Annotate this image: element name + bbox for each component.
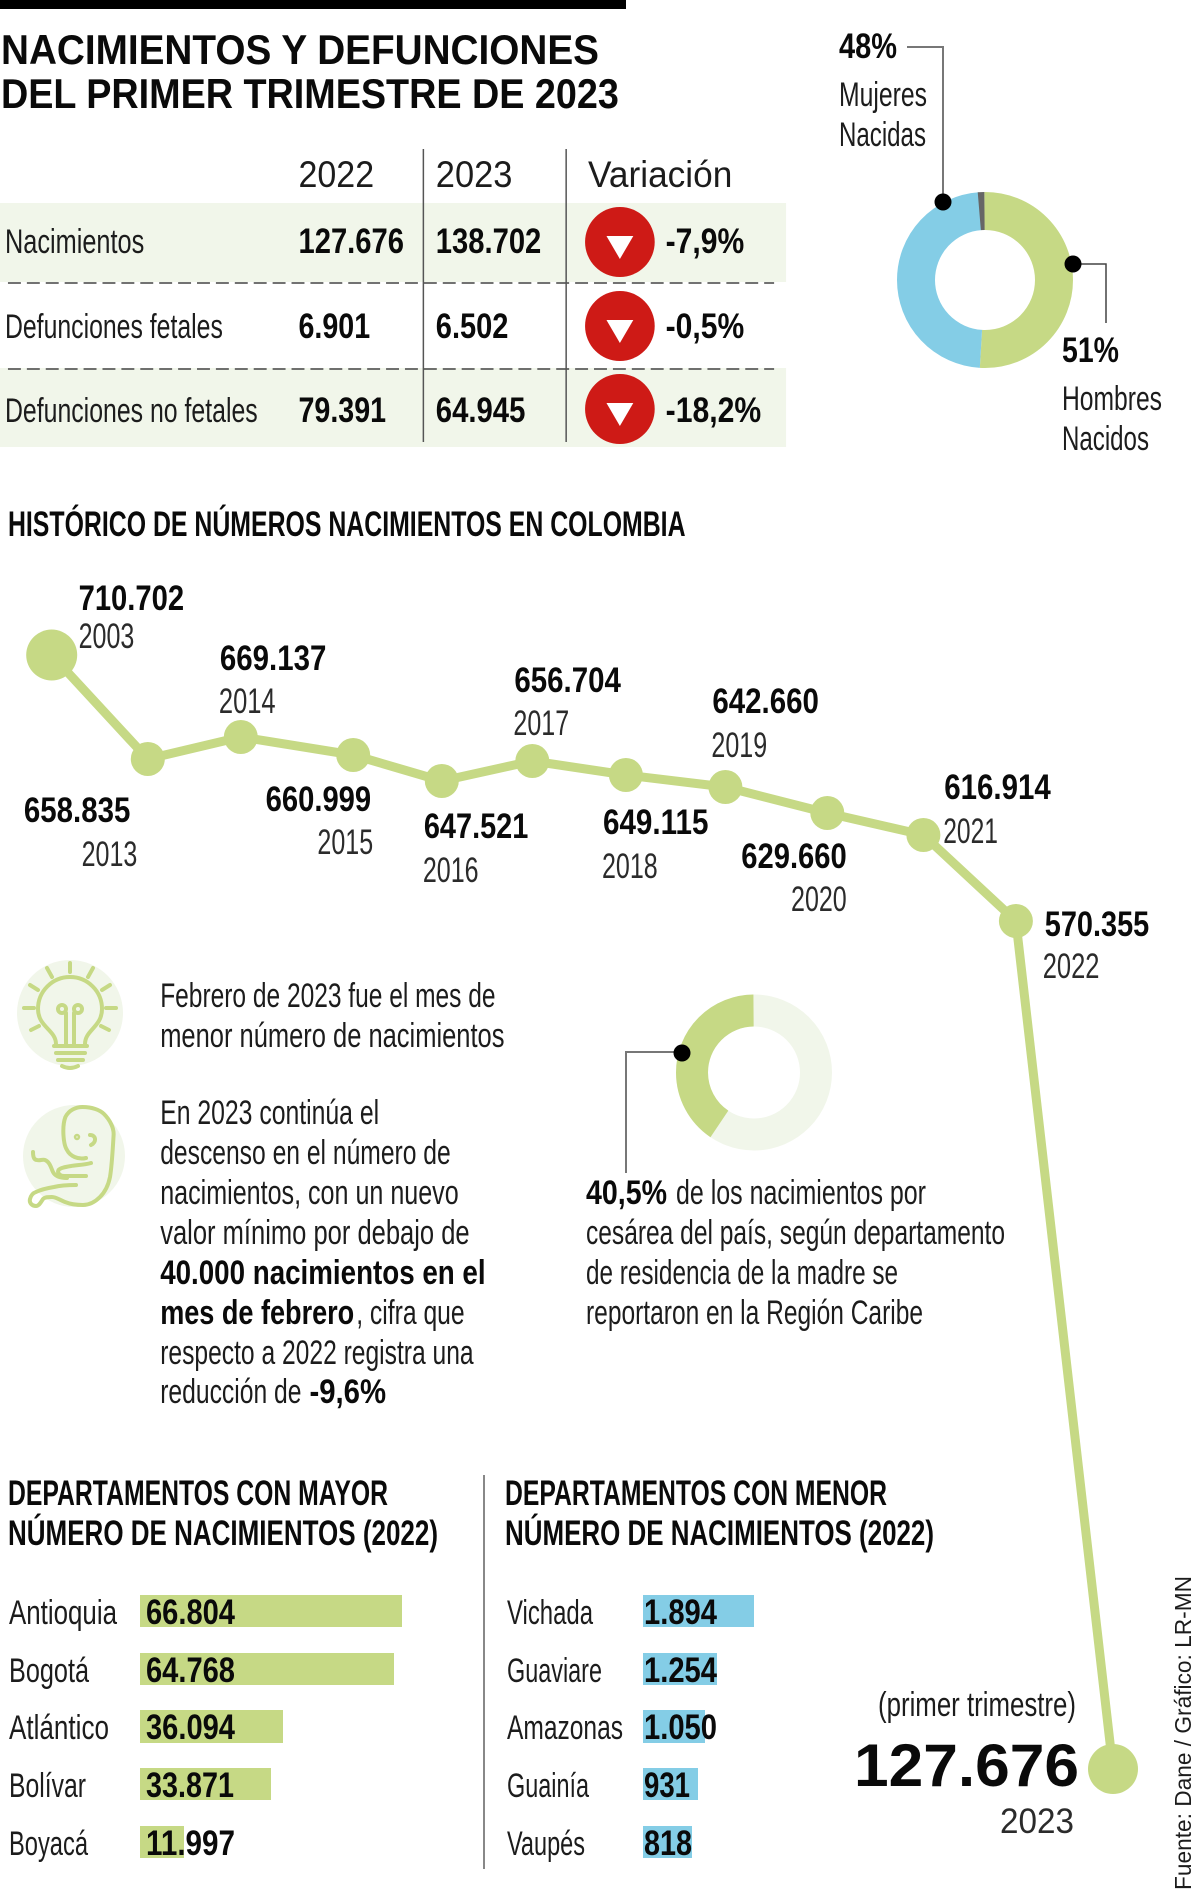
point label 2023 first quarter: 127.676 xyxy=(854,1732,1079,1799)
text: caesarean: de los nacimientos por xyxy=(676,1174,926,1212)
point label 2017 xyxy=(513,661,621,743)
table header xyxy=(298,154,732,195)
callout: men: 51% xyxy=(1062,331,1119,370)
point label 2019: 642.660 xyxy=(712,682,819,721)
point label 2017: 2017 xyxy=(513,704,569,743)
point label 2022: 2022 xyxy=(1043,947,1099,986)
text: descent explanation: -9,6% xyxy=(309,1373,386,1411)
bar chart: fewest births: 818 xyxy=(644,1824,692,1863)
bar chart: most births: 36.094 xyxy=(146,1708,235,1747)
row: defunciones fetales: 6.901 xyxy=(298,307,370,346)
point label 2019 xyxy=(711,682,819,765)
row: defunciones no fetales: Defunciones no fetales xyxy=(5,392,258,430)
text: caesarean: cesárea del país, según departamento xyxy=(586,1214,1005,1252)
text: descent explanation xyxy=(160,1094,486,1411)
callout: men: Nacidos xyxy=(1062,420,1149,458)
bar chart: fewest births: Vichada xyxy=(507,1594,593,1632)
top black bar xyxy=(0,0,626,9)
bar chart: most births: 66.804 xyxy=(146,1593,235,1632)
bar chart: fewest births: Guaviare xyxy=(507,1652,602,1690)
heading: most births xyxy=(8,1474,438,1553)
text: descent explanation: reducción de xyxy=(160,1373,301,1411)
row: defunciones no fetales: 79.391 xyxy=(298,391,386,430)
table header: Variación xyxy=(588,154,732,195)
text: febrero xyxy=(160,977,504,1055)
donut: men and women born xyxy=(916,211,1054,349)
text: descent explanation: respecto a 2022 registra una xyxy=(160,1334,474,1372)
bar chart: most births xyxy=(9,1593,402,1863)
point label 2021 xyxy=(943,768,1051,851)
point label 2015: 2015 xyxy=(317,823,373,862)
text: descent explanation: En 2023 continúa el xyxy=(160,1094,379,1132)
heading: most births: NÚMERO DE NACIMIENTOS (2022) xyxy=(8,1513,438,1553)
callout: women xyxy=(839,27,952,210)
row: nacimientos: 138.702 xyxy=(436,222,541,261)
heading: historical births: HISTÓRICO DE NÚMEROS NACIMIENTOS EN COLOMBIA xyxy=(8,504,686,544)
point label 2003: 710.702 xyxy=(79,579,184,618)
table header: 2022 xyxy=(298,154,374,195)
donut: caesarean share xyxy=(692,1010,816,1134)
row: defunciones no fetales xyxy=(5,374,761,444)
bar chart: fewest births: Vaupés xyxy=(507,1825,585,1863)
panel: sex donut chart xyxy=(839,27,1162,458)
point label 2023 first quarter: (primer trimestre) xyxy=(878,1686,1076,1724)
point label 2020: 629.660 xyxy=(741,837,847,876)
point label 2015 xyxy=(266,780,373,862)
text: caesarean: reportaron en la Región Caribe xyxy=(586,1294,923,1332)
callout: women: 48% xyxy=(839,27,897,66)
text: febrero: menor número de nacimientos xyxy=(160,1017,504,1055)
row: defunciones fetales: -0,5% xyxy=(666,307,744,346)
heading: fewest births: DEPARTAMENTOS CON MENOR xyxy=(505,1474,887,1513)
point label 2016: 2016 xyxy=(423,851,479,890)
source credit: Fuente: Dane / Gráfico: LR-MN xyxy=(1170,1576,1196,1890)
point label 2015: 660.999 xyxy=(266,780,371,819)
row: defunciones fetales: 6.502 xyxy=(436,307,508,346)
heading: fewest births xyxy=(505,1474,934,1553)
point label 2016 xyxy=(423,807,528,890)
text: descent explanation: mes de febrero xyxy=(160,1294,354,1332)
table header: 2023 xyxy=(436,154,512,195)
point label 2003: 2003 xyxy=(79,617,134,656)
point label 2023 first quarter xyxy=(854,1686,1079,1841)
point label 2014 xyxy=(219,639,326,721)
heading: most births: DEPARTAMENTOS CON MAYOR xyxy=(8,1474,388,1513)
bar chart: fewest births: 1.254 xyxy=(644,1651,717,1690)
panel: departments with fewest births xyxy=(505,1474,934,1863)
callout: women: Mujeres xyxy=(839,76,927,114)
point label 2021: 2021 xyxy=(943,812,998,851)
point label 2018 xyxy=(602,803,708,886)
row: nacimientos: Nacimientos xyxy=(5,223,144,261)
panel: departments with most births xyxy=(8,1474,438,1863)
bar chart: most births: Antioquia xyxy=(9,1594,117,1632)
point label 2013 xyxy=(24,791,137,874)
bar chart: most births: Atlántico xyxy=(9,1709,109,1747)
text: descent explanation: valor mínimo por debajo de xyxy=(160,1214,470,1252)
point label 2003 xyxy=(79,579,184,656)
point label 2021: 616.914 xyxy=(944,768,1051,807)
callout leader xyxy=(626,1044,690,1173)
title xyxy=(1,26,619,117)
point label 2016: 647.521 xyxy=(424,807,528,846)
row: defunciones fetales xyxy=(5,291,744,361)
point labels xyxy=(24,579,1149,986)
text: caesarean xyxy=(586,1174,1005,1332)
bar chart: most births: 33.871 xyxy=(146,1766,234,1805)
text: febrero: Febrero de 2023 fue el mes de xyxy=(160,977,496,1015)
point label 2013: 2013 xyxy=(82,835,137,874)
row: defunciones no fetales: 64.945 xyxy=(436,391,525,430)
point label 2022: 570.355 xyxy=(1045,905,1149,944)
bar chart: most births: 11.997 xyxy=(146,1824,235,1863)
bar chart: fewest births: 931 xyxy=(644,1766,690,1805)
icon: fetus xyxy=(23,1105,125,1207)
point label 2018: 649.115 xyxy=(603,803,708,842)
row: nacimientos xyxy=(5,207,744,277)
text: descent explanation: 40.000 nacimientos en el xyxy=(160,1254,486,1292)
text: descent explanation: , cifra que xyxy=(356,1294,465,1332)
bar chart: fewest births: 1.050 xyxy=(644,1708,717,1747)
point label 2013: 658.835 xyxy=(24,791,130,830)
point label 2017: 656.704 xyxy=(514,661,621,700)
callout: women: Nacidas xyxy=(839,116,926,154)
heading: fewest births: NÚMERO DE NACIMIENTOS (2022) xyxy=(505,1513,934,1553)
point label 2020 xyxy=(741,837,847,919)
title: DEL PRIMER TRIMESTRE DE 2023 xyxy=(1,70,619,117)
text: caesarean: 40,5% xyxy=(586,1174,667,1212)
bar chart: fewest births: 1.894 xyxy=(644,1593,717,1632)
line chart: historical births xyxy=(24,579,1149,1841)
bar chart: fewest births: Amazonas xyxy=(507,1709,623,1747)
text: caesarean: de residencia de la madre se xyxy=(586,1254,898,1292)
point label 2019: 2019 xyxy=(711,726,767,765)
point label 2022 xyxy=(1043,905,1149,986)
row: defunciones no fetales: -18,2% xyxy=(666,391,761,430)
row: nacimientos: 127.676 xyxy=(298,222,404,261)
callout: men: Hombres xyxy=(1062,380,1162,418)
row: defunciones fetales: Defunciones fetales xyxy=(5,308,223,346)
row: nacimientos: -7,9% xyxy=(666,222,744,261)
point label 2020: 2020 xyxy=(791,880,847,919)
icon: light bulb xyxy=(17,960,123,1068)
bar chart: fewest births: Guainía xyxy=(507,1767,589,1805)
callout: men xyxy=(1062,256,1162,458)
title: NACIMIENTOS Y DEFUNCIONES xyxy=(1,26,599,73)
panel: caesarean donut xyxy=(586,1010,1005,1332)
point label 2014: 669.137 xyxy=(220,639,326,678)
point label 2018: 2018 xyxy=(602,847,658,886)
point label 2014: 2014 xyxy=(219,682,276,721)
point label 2023 first quarter: 2023 xyxy=(1000,1802,1074,1841)
bar chart: fewest births xyxy=(507,1593,754,1863)
text: descent explanation: nacimientos, con un nuevo xyxy=(160,1174,459,1212)
bar chart: most births: Bolívar xyxy=(9,1767,86,1805)
bar chart: most births: Boyacá xyxy=(9,1825,88,1863)
panel: comparison table xyxy=(0,149,786,447)
bar chart: most births: 64.768 xyxy=(146,1651,235,1690)
bar chart: most births: Bogotá xyxy=(9,1652,89,1690)
text: descent explanation: descenso en el número de xyxy=(160,1134,451,1172)
